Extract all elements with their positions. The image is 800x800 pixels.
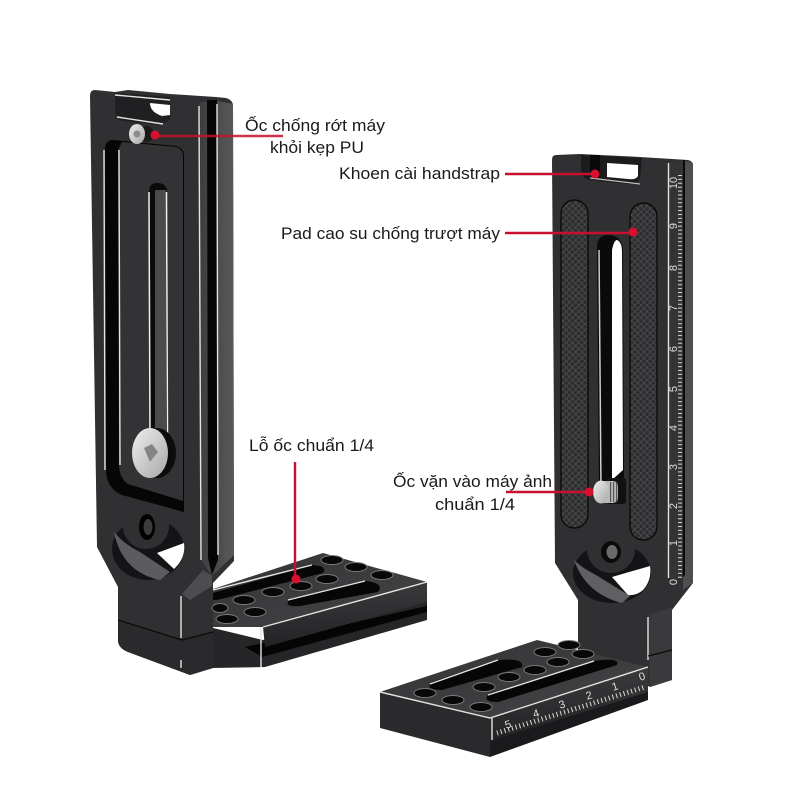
left plate top face [213, 553, 427, 627]
callout: 1/4 hole [249, 436, 374, 584]
right bracket rubber pad left [561, 200, 588, 528]
right bracket ruler scale [668, 175, 680, 585]
left bracket top handstrap notch [115, 93, 170, 125]
right bracket bottom plate [380, 640, 648, 757]
left bracket side rail [199, 101, 234, 576]
left bracket long slot [149, 183, 168, 435]
left bracket top safety screw [129, 124, 154, 144]
right plate front face with scale: 1 [610, 680, 620, 694]
left plate mounting slots [213, 565, 380, 606]
right plate front face with scale: 0 [637, 670, 647, 684]
right bracket ruler scale: 7 [668, 305, 680, 311]
callout: safety screw: khỏi kẹp PU [270, 139, 364, 157]
left plate screw holes [212, 556, 393, 624]
left plate lower rail [213, 596, 427, 668]
callout: handstrap loop [339, 165, 600, 183]
right plate side [380, 692, 490, 757]
right plate front face with scale: 4 [531, 707, 541, 721]
right bracket long slot [597, 235, 624, 490]
left bracket sliding screw [132, 428, 176, 478]
right plate top face [380, 640, 648, 718]
right bracket base edge [648, 607, 672, 687]
right bracket ruler scale: 2 [668, 503, 680, 509]
right bracket ruler scale: 1 [668, 540, 680, 546]
callout: rubber pad: Pad cao su chống trượt máy [281, 225, 501, 243]
right bracket ruler scale: 10 [668, 177, 680, 189]
right bracket ruler scale: 5 [668, 386, 680, 392]
callout: rubber pad [281, 225, 638, 243]
callout: camera screw: Ốc vặn vào máy ảnh [393, 471, 552, 491]
right bracket thumb screw [593, 478, 626, 504]
callout: camera screw [393, 471, 594, 514]
left bracket upright body [90, 90, 234, 675]
right bracket ruler scale: 3 [668, 464, 680, 470]
right bracket ruler scale: 6 [668, 346, 680, 352]
right bracket ruler scale: 0 [668, 579, 680, 585]
callout: handstrap loop: Khoen cài handstrap [339, 165, 500, 183]
right plate front face with scale: 3 [557, 698, 567, 712]
right bracket ruler scale: 9 [668, 223, 680, 229]
right bracket rubber pad right [630, 203, 657, 540]
left bracket bottom plate [212, 553, 427, 668]
right bracket crescent opening [573, 525, 651, 603]
left L bracket [90, 90, 234, 675]
right plate lower rail [490, 690, 648, 757]
right plate front face with scale [490, 667, 648, 741]
callout: camera screw: chuẩn 1/4 [435, 496, 515, 514]
left bracket crescent opening [112, 503, 184, 580]
right bracket ruler scale: 4 [668, 425, 680, 431]
callout: safety screw: Ốc chống rớt máy [245, 115, 386, 135]
left bracket base block [118, 570, 213, 675]
callout: 1/4 hole: Lỗ ốc chuẩn 1/4 [249, 436, 374, 455]
right plate mounting slots [430, 660, 617, 702]
left bracket recessed channel [104, 140, 184, 512]
right bracket ruler scale: 8 [668, 265, 680, 271]
right bracket handstrap notch [581, 155, 642, 184]
left plate front face [263, 582, 427, 647]
right plate screw holes [414, 640, 594, 712]
right plate front face with scale: 5 [503, 718, 513, 732]
right L bracket [552, 154, 693, 687]
callout: safety screw [150, 115, 386, 157]
right plate front face with scale: 2 [584, 689, 594, 703]
right bracket upright body [552, 154, 693, 687]
